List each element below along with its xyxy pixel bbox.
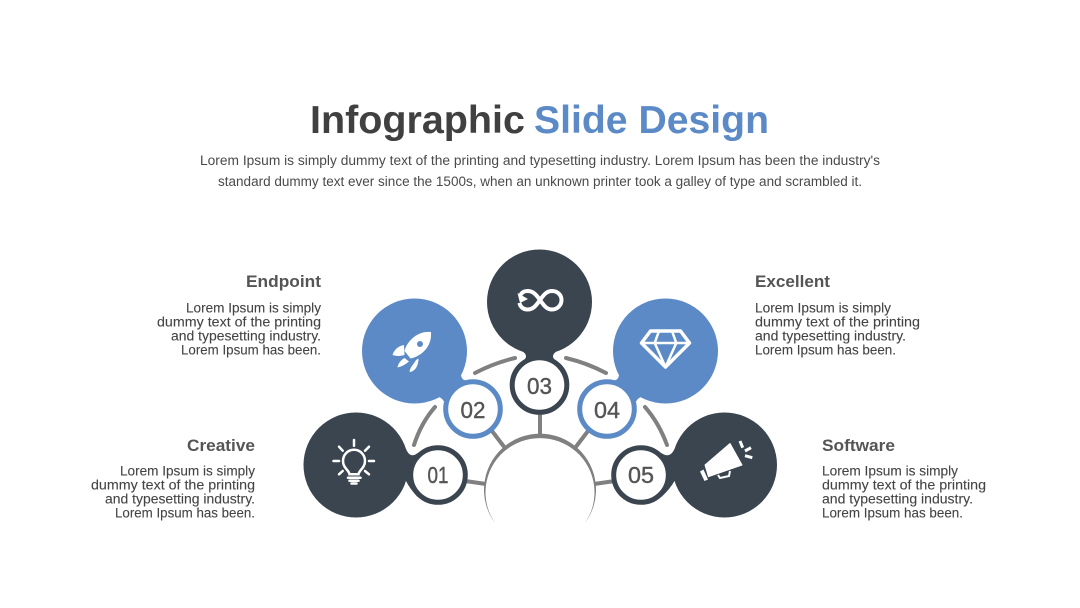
icon: megaphone: [700, 441, 752, 481]
text block: Endpoint: and typesetting industry.: [171, 328, 321, 344]
step 4: Excellent: 04: [594, 397, 620, 423]
step 3: [487, 250, 592, 412]
subtitle: standard dummy text ever since the 1500s, when an unknown printer took a galley of type and scrambled it.: [218, 174, 862, 189]
step 2: Endpoint: [362, 298, 500, 436]
text block: Excellent: Lorem Ipsum has been.: [755, 342, 896, 358]
step 1: Creative: 01: [428, 462, 448, 488]
step 4: Excellent: [580, 298, 718, 436]
title: Slide Design: [534, 99, 769, 142]
text block: Creative: Lorem Ipsum has been.: [115, 506, 255, 520]
text block: Excellent: Excellent: [755, 272, 830, 291]
connectors to hub: [465, 413, 615, 484]
text block: Software: Lorem Ipsum has been.: [822, 506, 963, 520]
text block: Excellent: [755, 272, 920, 358]
text block: Software: [822, 436, 986, 520]
gray outer arcs: [414, 358, 667, 445]
center hub arc: [484, 434, 596, 523]
step 3: 03: [527, 373, 552, 399]
text block: Endpoint: Lorem Ipsum has been.: [181, 342, 321, 358]
icon: infinity loop: [518, 291, 562, 310]
text block: Excellent: Lorem Ipsum is simply: [755, 300, 891, 316]
text block: Creative: and typesetting industry.: [105, 492, 255, 506]
text block: Excellent: and typesetting industry.: [755, 328, 906, 344]
title: Infographic: [310, 99, 525, 142]
text block: Creative: Creative: [187, 436, 255, 455]
text block: Endpoint: Endpoint: [246, 272, 321, 291]
text block: Endpoint: Lorem Ipsum is simply: [186, 300, 321, 316]
text block: Software: Software: [822, 436, 895, 455]
text block: Creative: Lorem Ipsum is simply: [120, 464, 255, 478]
subtitle: Lorem Ipsum is simply dummy text of the printing and typesetting industry. Lorem Ipsum has been the industry's: [200, 153, 880, 168]
text block: Software: and typesetting industry.: [822, 492, 973, 506]
step 5: Software: 05: [628, 462, 654, 488]
title: [310, 99, 769, 142]
subtitle: [200, 153, 880, 189]
icon: rocket: [392, 332, 431, 372]
icon: diamond: [642, 331, 690, 367]
step 5: Software: [614, 412, 777, 518]
text block: Endpoint: dummy text of the printing: [157, 314, 321, 330]
icon: light bulb: [334, 440, 374, 484]
text block: Endpoint: [157, 272, 321, 358]
text block: Creative: [91, 436, 255, 520]
text block: Excellent: dummy text of the printing: [755, 314, 920, 330]
step 1: Creative: [304, 412, 465, 518]
text block: Creative: dummy text of the printing: [91, 478, 255, 492]
text block: Software: dummy text of the printing: [822, 478, 986, 492]
text block: Software: Lorem Ipsum is simply: [822, 464, 958, 478]
step 2: Endpoint: 02: [460, 397, 486, 423]
